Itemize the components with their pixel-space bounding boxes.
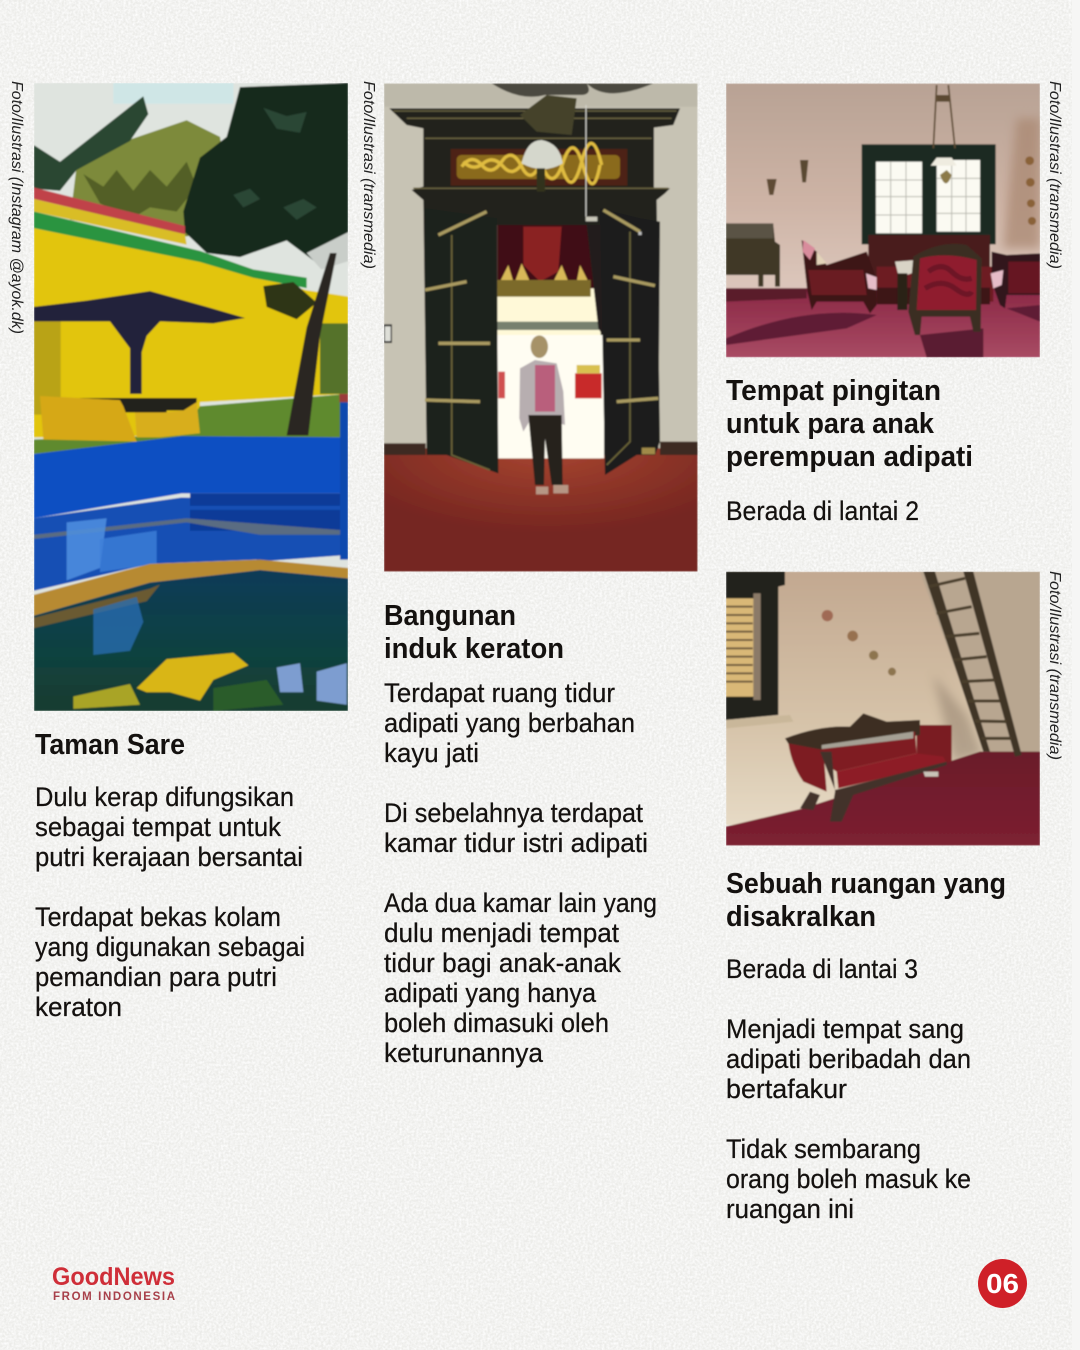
logo: GoodNews from Indonesia [52,1263,175,1303]
text block: Bangunan induk description: dulu menjadi tempat [384,918,619,948]
text block: Taman Sare description: sebagai tempat untuk [35,812,281,842]
text block: Bangunan induk description: boleh dimasuki oleh [384,1008,609,1038]
heading: Sebuah ruangan [726,868,1006,933]
text block: Bangunan induk description: adipati yang berbahan [384,708,635,738]
heading: Bangunan induk keraton: Bangunan [384,600,516,632]
panel: Tempat pingitan [726,81,1063,526]
photo: red sofa and wooden ladder [726,572,1040,846]
text block: Taman Sare description: Terdapat bekas kolam [35,902,281,932]
text block: Taman Sare description: keraton [35,992,122,1022]
text block: floor 2 note: Berada di lantai 2 [726,496,919,526]
text block: Sebuah ruangan description: ruangan ini [726,1194,854,1224]
text block: Taman Sare description: Dulu kerap difungsikan [35,782,294,812]
text block: Sebuah ruangan description [726,954,971,1224]
heading: Taman Sare: Taman Sare [35,729,185,761]
text block: Bangunan induk description: tidur bagi anak-anak [384,948,621,978]
text block: Taman Sare description: putri kerajaan bersantai [35,842,303,872]
text block: Sebuah ruangan description: Tidak sembarang [726,1134,921,1164]
text block: Bangunan induk description: Ada dua kamar lain yang [384,888,657,918]
heading: Tempat pingitan: untuk para anak [726,408,935,440]
text block: Sebuah ruangan description: Menjadi tempat sang [726,1014,964,1044]
panel: Taman Sare [8,81,348,1022]
logo: GoodNews from Indonesia: FROM INDONESIA [53,1291,175,1303]
text block: Sebuah ruangan description: Berada di lantai 3 [726,954,918,984]
page number badge: 06 [986,1268,1019,1299]
text block: Bangunan induk description: Terdapat ruang tidur [384,678,615,708]
photo credit: transmedia: Foto/Ilustrasi (transmedia) [1046,571,1063,760]
photo credit: transmedia: Foto/Ilustrasi (transmedia) [360,81,377,269]
text block: Sebuah ruangan description: adipati beribadah dan [726,1044,971,1074]
photo: palace doorway with woman [384,83,698,572]
photo credit: transmedia: Foto/Ilustrasi (transmedia) [1046,81,1063,269]
heading: Sebuah ruangan: Sebuah ruangan yang [726,868,1006,900]
text block: Bangunan induk description: adipati yang hanya [384,978,597,1008]
photo: yellow wall, gazebo and blue pool [34,83,348,711]
heading: Tempat pingitan [726,375,973,473]
heading: Bangunan induk keraton [384,600,564,665]
photo credit: Instagram ayok.dk: Foto/Ilustrasi (Instagram @ayok.dk) [8,81,25,334]
text block: Taman Sare description: yang digunakan sebagai [35,932,305,962]
heading: Tempat pingitan: Tempat pingitan [726,375,941,407]
text block: Bangunan induk description: kamar tidur istri adipati [384,828,648,858]
text block: Bangunan induk description: keturunannya [384,1038,544,1068]
photo: sitting room with red chairs [726,83,1040,357]
text block: Sebuah ruangan description: orang boleh masuk ke [726,1164,971,1194]
page number badge [978,1259,1027,1308]
text block: Bangunan induk description: kayu jati [384,738,479,768]
logo: GoodNews from Indonesia: GoodNews [52,1263,175,1291]
heading: Tempat pingitan: perempuan adipati [726,441,973,473]
panel: Sebuah ruangan [726,571,1063,1224]
heading: Sebuah ruangan: disakralkan [726,901,876,933]
text block: Sebuah ruangan description: bertafakur [726,1074,847,1104]
text block: Bangunan induk description: Di sebelahnya terdapat [384,798,643,828]
heading: Bangunan induk keraton: induk keraton [384,633,564,665]
text block: Bangunan induk description [384,678,657,1068]
text block: Taman Sare description [35,782,305,1022]
panel: Bangunan induk keraton [360,81,698,1068]
text block: Taman Sare description: pemandian para putri [35,962,277,992]
